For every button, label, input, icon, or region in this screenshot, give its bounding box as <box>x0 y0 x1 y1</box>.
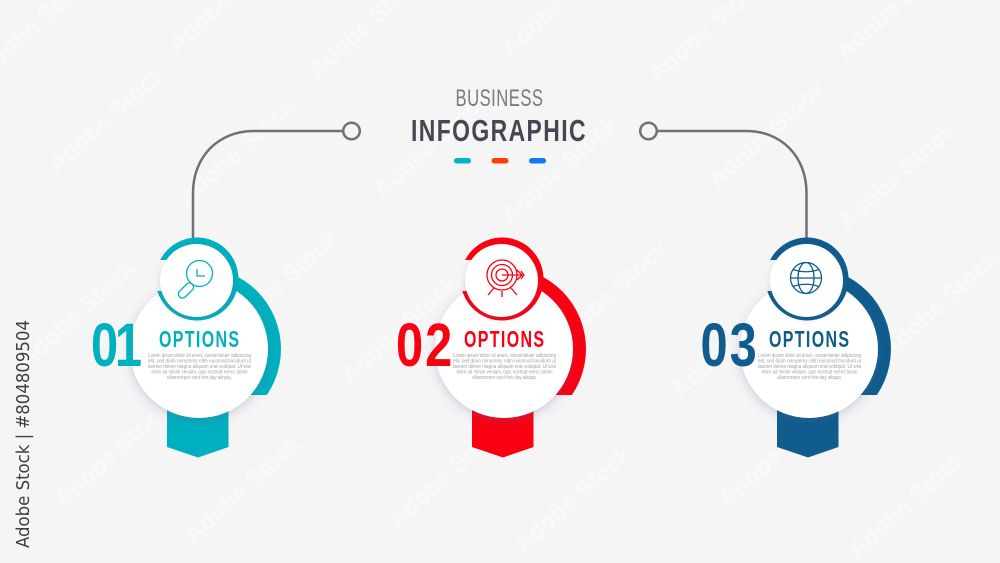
text: Adobe Stock <box>336 270 464 389</box>
text: Adobe Stock <box>703 75 831 194</box>
text: Adobe Stock <box>179 430 307 549</box>
text: Adobe Stock <box>876 245 1000 364</box>
icon circle 03 <box>770 244 843 317</box>
text block 02: elit, sed diam nonummy nibh euismod tincidunt ut <box>453 358 557 364</box>
heading 03: OPTIONS <box>769 327 850 353</box>
icon: globe <box>790 262 822 294</box>
text: Adobe Stock <box>546 235 674 354</box>
ring 01 <box>157 237 239 320</box>
text block 02: ullamcorper sont this day aliquip. <box>472 375 537 381</box>
text block 02 <box>453 353 557 381</box>
text block 03: ullamcorper sont this day aliquip. <box>777 375 842 381</box>
text block 01: Lorem ipsum dolor sit amet, consectetuer adipiscing <box>148 353 251 359</box>
main circle 01 <box>130 280 268 418</box>
icon: target with arrow <box>487 260 524 297</box>
text: Adobe Stock <box>713 395 841 514</box>
text: Adobe Stock <box>216 225 344 344</box>
number 02: 02 <box>396 311 454 379</box>
colour dashes under title <box>454 158 546 164</box>
ribbon 03 <box>777 400 838 458</box>
text block 02: laoreet dolore magna aliquam erat volutpat. Ut wisi <box>453 364 556 370</box>
right connector line <box>640 123 806 238</box>
main circle 03 <box>740 280 878 418</box>
text block 01: elit, sed diam nonummy nibh euismod tincidunt ut <box>148 358 252 364</box>
ribbon 02 <box>472 400 534 458</box>
icon circle 02 <box>465 244 538 317</box>
text: Adobe Stock <box>666 285 794 404</box>
main circle 02 <box>435 280 573 418</box>
left connector line <box>193 123 360 238</box>
ring 03 <box>767 237 849 320</box>
text block 03: laoreet dolore magna aliquam erat volutpat. Ut wisi <box>758 364 861 370</box>
panel: option 01 <box>91 237 281 458</box>
text block 01: ullamcorper sont this day aliquip. <box>167 375 232 381</box>
icon circle 01 <box>160 244 233 317</box>
text block 01: laoreet dolore magna aliquam erat volutpat. Ut wisi <box>148 364 251 370</box>
title: Business Infographic: BUSINESS <box>456 85 544 112</box>
panel: option 03 <box>700 237 891 458</box>
text block 01: enim ad minim veniam, quis nostrud exerci tation <box>152 370 248 376</box>
text block 03: Lorem ipsum dolor sit amet, consectetuer adipiscing <box>758 353 861 359</box>
outer arc 03 <box>846 277 891 395</box>
panel: option 02 <box>396 237 586 458</box>
text block 03 <box>758 353 862 381</box>
text: Adobe Stock <box>383 415 511 534</box>
text: Adobe Stock <box>49 395 177 514</box>
heading 01: OPTIONS <box>159 327 240 353</box>
text: Adobe Stock <box>43 60 171 179</box>
text: Adobe Stock <box>833 117 961 236</box>
number 03: 03 <box>700 311 759 379</box>
outer arc 02 <box>542 277 586 395</box>
text: Adobe Stock <box>843 445 971 563</box>
text: Adobe Stock <box>368 85 496 204</box>
title: Business Infographic: INFOGRAPHIC <box>411 113 587 148</box>
text: Adobe Stock <box>496 110 624 229</box>
heading 02: OPTIONS <box>464 327 545 353</box>
text block 02: enim ad minim veniam, quis nostrud exerci tation <box>456 370 553 376</box>
outer arc 01 <box>236 277 281 395</box>
text block 03: elit, sed diam nonummy nibh euismod tincidunt ut <box>758 358 862 364</box>
ribbon 01 <box>167 400 228 458</box>
text: Adobe Stock <box>173 93 301 212</box>
vertical stock credit: Adobe Stock | #804809504 <box>14 320 34 548</box>
text block 02: Lorem ipsum dolor sit amet, consectetuer adipiscing <box>453 353 556 359</box>
title: Business Infographic <box>411 85 587 148</box>
text: Adobe Stock <box>13 255 141 374</box>
ring 02 <box>462 237 544 320</box>
text: Adobe Stock <box>509 440 637 559</box>
text block 01 <box>148 353 252 381</box>
icon: magnifier with clock <box>177 260 212 300</box>
text block 03: enim ad minim veniam, quis nostrud exerci tation <box>762 370 858 376</box>
number 01: 01 <box>91 311 141 379</box>
